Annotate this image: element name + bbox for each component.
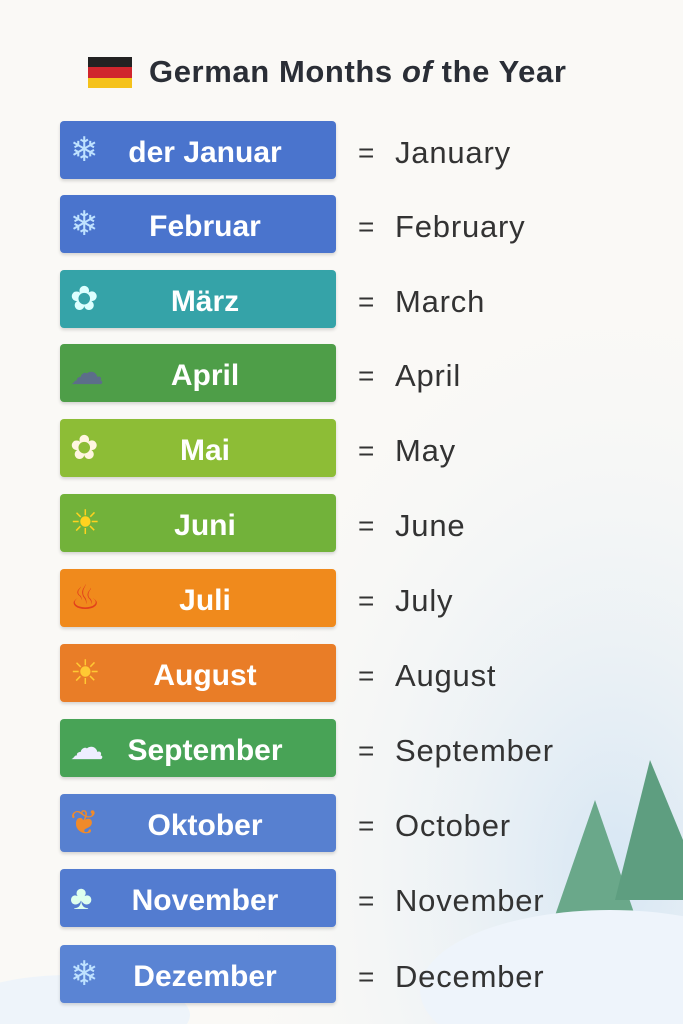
row: August — [59, 644, 496, 705]
row: Januar: ❄ — [70, 131, 98, 169]
row: November: November — [132, 884, 278, 917]
row: Mai: May — [395, 433, 456, 468]
icon: german flag — [88, 57, 132, 88]
row: Februar — [59, 195, 525, 256]
row: Oktober: Oktober — [147, 809, 263, 842]
row: November: = — [358, 885, 374, 916]
row: Maerz — [59, 270, 485, 331]
row: November — [59, 869, 544, 930]
row: April: April — [395, 358, 461, 393]
row: August: ☀ — [70, 654, 100, 692]
row: September: September — [127, 734, 283, 767]
row: Januar: = — [358, 137, 374, 168]
row: Februar: February — [395, 209, 525, 244]
row: Januar — [59, 121, 511, 182]
row: Oktober: = — [358, 810, 374, 841]
row: Juli: July — [395, 583, 453, 618]
row: Juli: Juli — [179, 584, 231, 617]
row: Juni: ☀ — [70, 504, 100, 542]
row: Juni: = — [358, 510, 374, 541]
row: Juli: = — [358, 585, 374, 616]
row: Februar: ❄ — [70, 205, 98, 243]
row: Januar: January — [395, 135, 511, 170]
row: November: ♣ — [70, 879, 92, 917]
row: Juni — [59, 494, 465, 555]
row: Oktober: October — [395, 808, 511, 843]
row: Mai: Mai — [180, 434, 230, 467]
title: German Months of the Year — [149, 54, 567, 89]
row: Maerz: March — [395, 284, 485, 319]
row: August: = — [358, 660, 374, 691]
row: Dezember: = — [358, 961, 374, 992]
row: Januar: der Januar — [128, 136, 282, 169]
row: August: August — [395, 658, 496, 693]
row: September: ☁ — [70, 729, 104, 767]
row: Dezember — [59, 945, 544, 1006]
row: Mai — [59, 419, 456, 480]
row: Mai: ✿ — [70, 429, 98, 467]
row: April: April — [171, 359, 239, 392]
row: Juli — [59, 569, 453, 630]
row: Maerz: ✿ — [70, 280, 98, 318]
row: Juni: June — [395, 508, 465, 543]
row: September: = — [358, 735, 374, 766]
row: Dezember: ❄ — [70, 955, 98, 993]
row: Juli: ♨ — [70, 579, 100, 617]
row: April — [59, 344, 461, 405]
row: November: November — [395, 883, 544, 918]
row: Februar: Februar — [149, 210, 261, 243]
row: Oktober: ❦ — [70, 804, 98, 842]
row: April: ☁ — [70, 354, 104, 392]
row: Dezember: December — [395, 959, 544, 994]
row: Juni: Juni — [174, 509, 236, 542]
row: Februar: = — [358, 211, 374, 242]
row: Maerz: März — [171, 285, 239, 318]
row: August: August — [153, 659, 257, 692]
row: Maerz: = — [358, 286, 374, 317]
row: Oktober — [59, 794, 511, 855]
row: September: September — [395, 733, 554, 768]
row: September — [59, 719, 554, 780]
row: April: = — [358, 360, 374, 391]
row: Dezember: Dezember — [133, 960, 277, 993]
row: Mai: = — [358, 435, 374, 466]
